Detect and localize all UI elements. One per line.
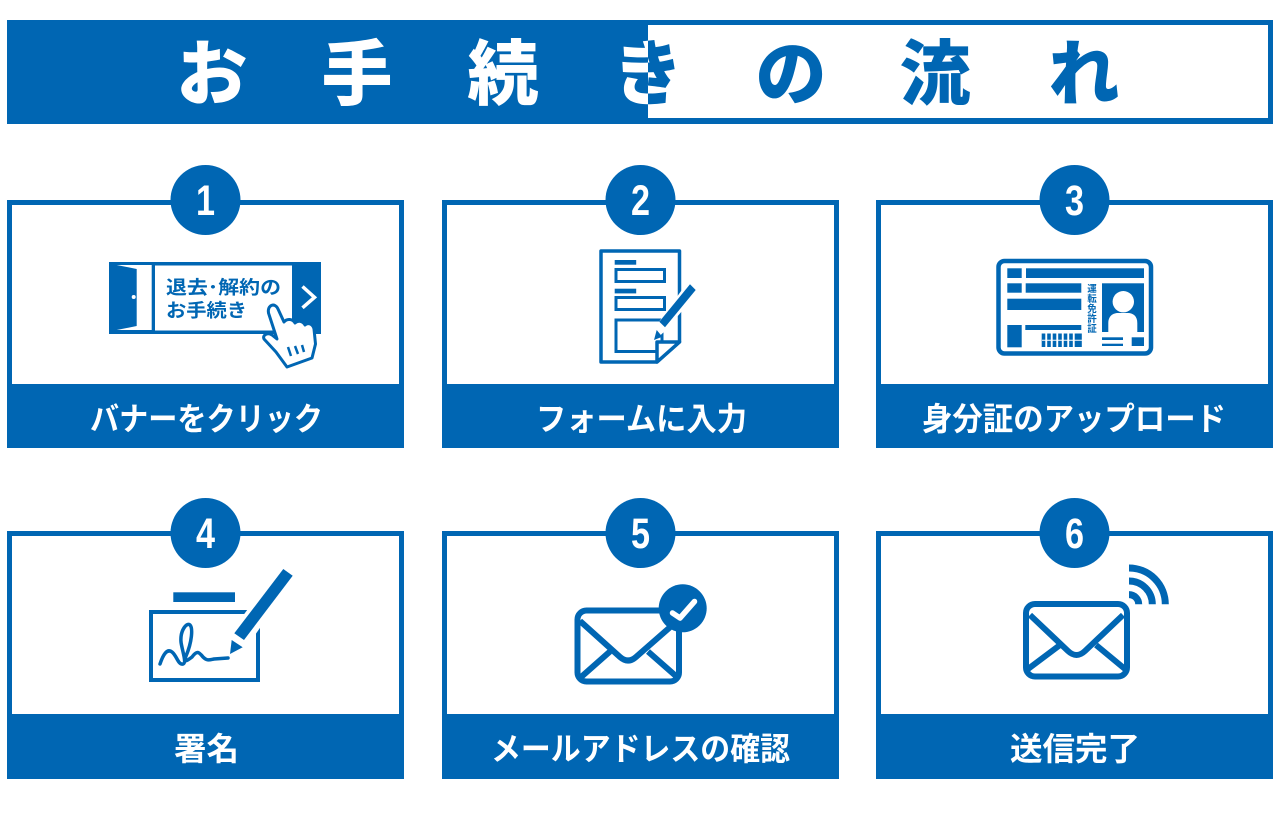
label: click banner: バナーをクリック <box>90 401 323 437</box>
step number 2: 2 <box>631 177 650 225</box>
step number 4 <box>170 498 240 568</box>
step number 6 <box>1040 498 1110 568</box>
step number 5: 5 <box>631 510 650 558</box>
step number 1 <box>170 165 240 235</box>
licence label: 免 <box>1087 303 1097 315</box>
licence label: 転 <box>1087 293 1097 305</box>
label: complete: 送信完了 <box>1010 731 1140 767</box>
step number 3 <box>1040 165 1110 235</box>
panel: step 6 <box>876 498 1273 779</box>
step number 1: 1 <box>196 177 215 225</box>
step number 6: 6 <box>1065 510 1084 558</box>
icon: envelope with check badge <box>578 584 707 682</box>
licence label <box>1087 284 1097 335</box>
icon: banner with hand pointer: お手続き <box>166 300 247 321</box>
step number 2 <box>606 165 676 235</box>
label: upload ID: 身分証のアップロード <box>922 401 1226 437</box>
title: お手続きの流れ <box>176 36 1120 115</box>
icon: banner with hand pointer <box>109 262 321 367</box>
step number 4: 4 <box>196 510 215 558</box>
step number 3: 3 <box>1065 177 1084 225</box>
title banner <box>7 20 1273 124</box>
panel: step 3 <box>876 165 1273 448</box>
panel: step 5 <box>442 498 839 779</box>
licence label: 運 <box>1087 284 1097 295</box>
licence label: 証 <box>1087 324 1097 335</box>
icon: envelope with signal waves <box>1026 568 1165 676</box>
licence label: 許 <box>1087 313 1097 325</box>
label: confirm email: メールアドレスの確認 <box>491 731 790 767</box>
label: signature: 署名 <box>174 731 239 767</box>
icon: driver's licence card <box>998 261 1151 354</box>
step number 5 <box>606 498 676 568</box>
label: fill in form: フォームに入力 <box>536 401 747 437</box>
icon: banner with hand pointer: 退去･解約の <box>166 277 281 298</box>
icon: signature and pen <box>151 564 297 680</box>
panel: step 2 <box>442 165 839 448</box>
panel: step 4 <box>7 498 404 779</box>
icon: form and pen <box>601 251 700 362</box>
panel: step 1 <box>7 165 404 448</box>
